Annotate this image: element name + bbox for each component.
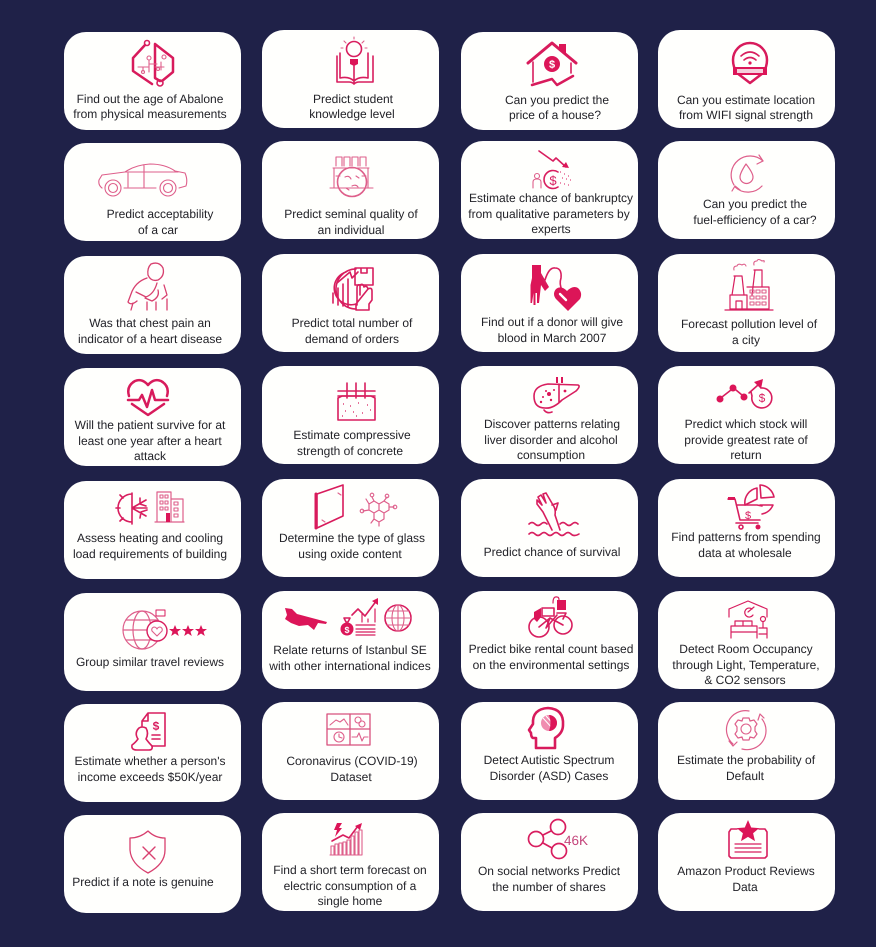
- text: knowledge level: [309, 107, 395, 121]
- text: [468, 191, 633, 236]
- text: [73, 531, 227, 561]
- card: electric consumption: [262, 813, 439, 911]
- text: using oxide content: [298, 547, 402, 561]
- text: Can you estimate location: [677, 93, 815, 107]
- text: Forecast pollution level of: [681, 317, 818, 331]
- text: data at wholesale: [698, 546, 792, 560]
- icon: dashboard: [327, 714, 370, 745]
- card: heart attack survival: [64, 368, 241, 466]
- text: Estimate chance of bankruptcy: [469, 191, 633, 205]
- text: Estimate whether a person's: [74, 754, 226, 768]
- text: Predict acceptability: [107, 207, 213, 221]
- icon: drowning hand: [529, 493, 579, 536]
- icon: glass pane and molecule: [316, 485, 397, 528]
- icon: cart and pie chart: $: [745, 510, 751, 522]
- text: [284, 207, 418, 237]
- text: blood in March 2007: [498, 331, 607, 345]
- icon: fuel drop cycle: [731, 155, 763, 192]
- text: & CO2 sensors: [704, 673, 786, 687]
- text: indicator of a heart disease: [78, 332, 222, 346]
- text: Group similar travel reviews: [76, 655, 224, 669]
- text: Default: [726, 769, 765, 783]
- card: blood donor: [461, 254, 638, 352]
- icon: map, chart and globe: $: [344, 625, 350, 635]
- text: Discover patterns relating: [484, 417, 620, 431]
- text: load requirements of building: [73, 547, 227, 561]
- text: liver disorder and alcohol: [484, 433, 618, 447]
- text: Dataset: [330, 770, 372, 784]
- icon: head with brain: [529, 708, 563, 748]
- icon: rising stock dots: $: [759, 391, 766, 405]
- text: Find out the age of Abalone: [77, 92, 224, 106]
- text: [268, 643, 431, 673]
- card: liver: [461, 366, 638, 464]
- icon: person and pay slip: $: [153, 719, 160, 733]
- icon: lightning and rising bars: [330, 823, 362, 855]
- icon: cart and pie chart: [728, 485, 774, 530]
- icon: share with 46K: 46K: [564, 833, 588, 848]
- card: fuel efficiency: [658, 141, 835, 239]
- card: car acceptability: [64, 143, 241, 241]
- text: return: [730, 448, 762, 462]
- icon: shield with cross: [130, 831, 165, 873]
- text: [672, 642, 820, 687]
- text: Find patterns from spending: [671, 530, 821, 544]
- text: Coronavirus (COVID-19): [286, 754, 418, 768]
- card: travel reviews: [64, 593, 241, 691]
- icon: abalone circuit hexagon: [133, 40, 173, 86]
- icon: star review card: [729, 820, 767, 858]
- icon: factory: [725, 260, 773, 310]
- text: [75, 418, 226, 463]
- card: genuine note: [64, 815, 241, 913]
- text: [681, 317, 818, 347]
- card: room occupancy: [658, 591, 835, 689]
- text: On social networks Predict: [478, 864, 621, 878]
- card: abalone age: [64, 32, 241, 130]
- icon: person holding chest: [128, 263, 167, 310]
- text: Estimate the probability of: [677, 753, 816, 767]
- card: income: [64, 704, 241, 802]
- card: chest pain: [64, 256, 241, 354]
- text: from physical measurements: [73, 107, 227, 121]
- card: stock return: [658, 366, 835, 464]
- text: [107, 207, 213, 237]
- icon: share with 46K: [528, 820, 588, 858]
- text: Predict which stock will: [685, 417, 807, 431]
- text: Find a short term forecast on: [273, 863, 427, 877]
- text: demand of orders: [305, 332, 399, 346]
- text: on the environmental settings: [473, 658, 629, 672]
- text: Predict bike rental count based: [469, 642, 633, 656]
- text: [73, 92, 227, 121]
- card: autism: [461, 702, 638, 800]
- icon: person and pay slip: [132, 713, 165, 750]
- text: [693, 197, 817, 227]
- icon: liver: [534, 377, 579, 413]
- text: [677, 864, 815, 894]
- text: [684, 417, 808, 462]
- text: price of a house?: [509, 108, 601, 122]
- icon: concrete block with rebar: [338, 383, 375, 420]
- text: Will the patient survive for at: [75, 418, 226, 432]
- text: [74, 754, 226, 784]
- text: Can you predict the: [505, 93, 609, 107]
- text: strength of concrete: [297, 444, 403, 458]
- text: Can you predict the: [703, 197, 807, 211]
- card: social shares: [461, 813, 638, 911]
- text: [484, 753, 614, 783]
- card: demand of orders: [262, 254, 439, 352]
- card: bike rental: [461, 591, 638, 689]
- icon: globe, heart and stars: [123, 610, 207, 649]
- card: house price: [461, 32, 638, 130]
- card: covid: [262, 702, 439, 800]
- card: pollution: [658, 254, 835, 352]
- text: [677, 93, 815, 122]
- text: electric consumption of a: [284, 879, 417, 893]
- icon: map, chart and globe: [285, 598, 411, 636]
- text: consumption: [517, 448, 585, 462]
- text: [478, 864, 621, 894]
- text: Assess heating and cooling: [77, 531, 223, 545]
- card: type of glass: [262, 479, 439, 577]
- text: Find out if a donor will give: [481, 315, 623, 329]
- icon: rental bike: [529, 597, 572, 637]
- text: [505, 93, 609, 122]
- icon: sun-snowflake and building: [116, 492, 184, 524]
- text: [286, 754, 418, 784]
- icon: house with dollar: $: [549, 59, 555, 71]
- text: [293, 428, 411, 458]
- text: with other international indices: [268, 659, 431, 673]
- text: [469, 642, 633, 672]
- icon: hand, tube and heart: [530, 265, 581, 311]
- icon: gear, box and hand: [333, 268, 373, 310]
- text: [78, 316, 222, 346]
- card: concrete: [262, 366, 439, 464]
- text: [671, 530, 821, 560]
- text: Predict if a note is genuine: [72, 875, 214, 889]
- text: attack: [134, 449, 167, 463]
- text: Predict seminal quality of: [284, 207, 418, 221]
- text: of a car: [138, 223, 178, 237]
- icon: car: [99, 164, 187, 196]
- card: wholesale spending: [658, 479, 835, 577]
- text: Predict chance of survival: [484, 545, 620, 559]
- icon: wifi pin: [733, 43, 767, 83]
- card: amazon reviews: [658, 813, 835, 911]
- icon: house with dollar: [528, 43, 576, 85]
- text: income exceeds $50K/year: [78, 770, 222, 784]
- text: [279, 531, 425, 561]
- card: default: [658, 702, 835, 800]
- text: Estimate compressive: [293, 428, 411, 442]
- text: Was that chest pain an: [89, 316, 211, 330]
- card: heating and cooling: [64, 481, 241, 579]
- text: [484, 417, 620, 462]
- card: Istanbul SE: [262, 591, 439, 689]
- text: through Light, Temperature,: [672, 658, 820, 672]
- text: single home: [318, 894, 383, 908]
- card: wifi location: [658, 30, 835, 128]
- text: Determine the type of glass: [279, 531, 425, 545]
- icon: heartbeat: [128, 380, 168, 415]
- text: from qualitative parameters by: [468, 207, 630, 221]
- text: the number of shares: [492, 880, 606, 894]
- text: Relate returns of Istanbul SE: [273, 643, 427, 657]
- text: Detect Room Occupancy: [679, 642, 813, 656]
- icon: rising stock dots: [716, 379, 772, 408]
- icon: book and light bulb: [337, 37, 373, 84]
- text: least one year after a heart: [78, 434, 222, 448]
- text: provide greatest rate of: [684, 433, 808, 447]
- card: student knowledge: [262, 30, 439, 128]
- icon: falling coin: $: [549, 173, 557, 188]
- icon: bedroom: [729, 601, 767, 638]
- text: Amazon Product Reviews: [677, 864, 815, 878]
- card: seminal quality: [262, 141, 439, 239]
- text: Predict student: [313, 92, 394, 106]
- icon: falling coin: [533, 151, 571, 188]
- text: [309, 92, 395, 121]
- text: [677, 753, 816, 783]
- text: [481, 315, 623, 345]
- icon: test tubes and petri dish: [330, 157, 373, 196]
- text: from WIFI signal strength: [679, 108, 813, 122]
- icon: gear cycle: [726, 711, 766, 750]
- text: a city: [732, 333, 760, 347]
- card: bankruptcy: [461, 141, 638, 239]
- card: survival: [461, 479, 638, 577]
- text: fuel-efficiency of a car?: [693, 213, 817, 227]
- text: Data: [732, 880, 758, 894]
- text: [273, 863, 427, 908]
- text: Disorder (ASD) Cases: [490, 769, 608, 783]
- text: Predict total number of: [292, 316, 413, 330]
- text: Detect Autistic Spectrum: [484, 753, 614, 767]
- text: [292, 316, 413, 346]
- text: an individual: [318, 223, 384, 237]
- text: experts: [531, 222, 571, 236]
